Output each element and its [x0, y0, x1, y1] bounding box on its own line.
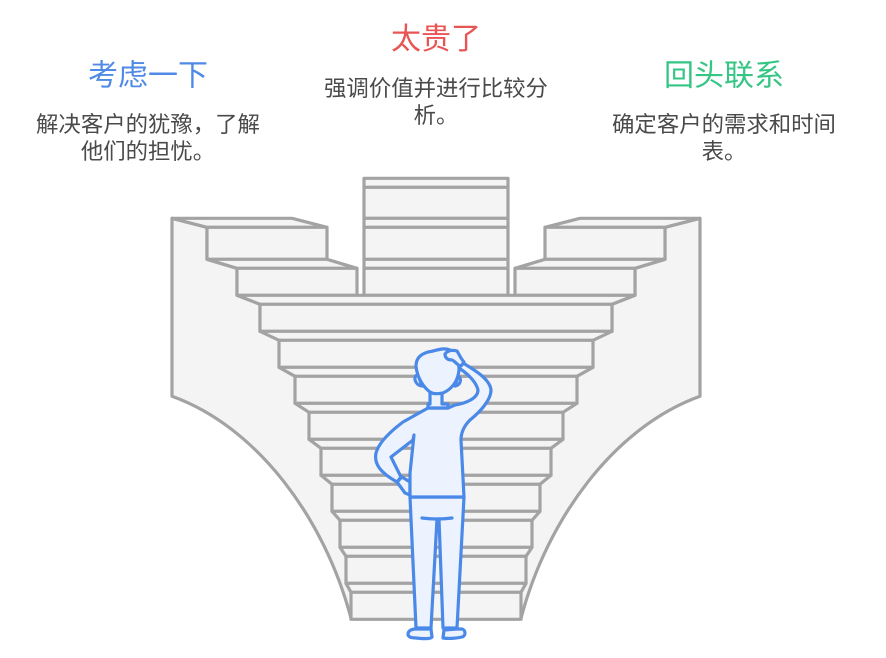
head	[416, 349, 459, 394]
description: consider	[36, 112, 260, 164]
legs	[410, 497, 464, 628]
heading: consider: 考虑一下	[88, 60, 208, 92]
description: too expensive: 析。	[414, 103, 458, 128]
center column	[364, 178, 508, 295]
staircase funnel	[172, 178, 700, 619]
description: follow up: 表。	[702, 139, 746, 164]
heading: too expensive: 太贵了	[391, 23, 481, 56]
right wall	[436, 218, 700, 618]
left wall	[172, 218, 436, 618]
left shoe	[408, 629, 432, 639]
person scratching head	[376, 349, 491, 639]
right shoe	[443, 629, 465, 638]
central steps	[237, 295, 635, 619]
right upper steps	[515, 218, 700, 295]
text block: consider	[36, 60, 260, 164]
neck and collar	[428, 390, 448, 408]
description: consider: 解决客户的犹豫，了解	[36, 112, 260, 137]
left ear	[415, 375, 422, 386]
heading: follow up: 回头联系	[664, 60, 784, 92]
pocket line	[422, 518, 452, 519]
right ear	[455, 376, 460, 386]
description: consider: 他们的担忧。	[81, 139, 215, 164]
description: follow up: 确定客户的需求和时间	[612, 112, 836, 137]
text block: follow up	[612, 60, 836, 164]
left upper steps	[172, 218, 357, 295]
hand	[445, 350, 464, 366]
torso and arms	[376, 363, 491, 497]
description: too expensive: 强调价值并进行比较分	[324, 76, 548, 101]
cuff	[397, 477, 410, 495]
description: too expensive	[324, 76, 548, 128]
description: follow up	[612, 112, 836, 164]
text block: too expensive	[324, 23, 548, 128]
